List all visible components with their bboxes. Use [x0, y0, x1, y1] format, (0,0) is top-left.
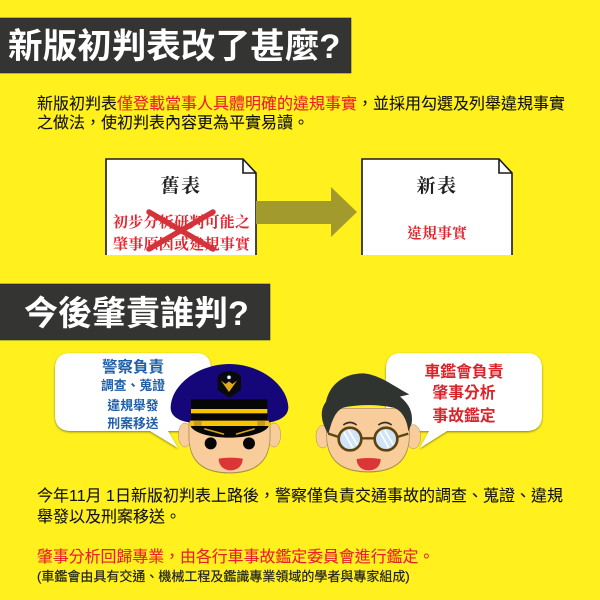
- heading: who decides: [0, 284, 270, 340]
- text block: police role: 今年11月 1日新版初判表上路後，警察僅負責交通事故的調查、蒐證、違規: [37, 487, 563, 505]
- callout: police duties: 違規舉發: [107, 398, 159, 413]
- heading: what changed: 新版初判表改了甚麼?: [8, 28, 340, 66]
- text block: police role: 舉發以及刑案移送。: [37, 508, 181, 526]
- panel: old form: 初步分析研判可能之: [113, 213, 250, 231]
- callout: review committee duties: [386, 353, 542, 448]
- icon: expert with glasses: [316, 373, 421, 472]
- panel: new form: [362, 159, 512, 255]
- callout: police duties: 調查、蒐證: [101, 378, 165, 393]
- panel: old form: 肇事原因或違規事實: [113, 235, 252, 253]
- callout: police duties: [55, 353, 211, 448]
- icon: police badge: [218, 371, 241, 398]
- heading: who decides: 今後肇責誰判?: [24, 295, 249, 333]
- icon: red cross: [149, 212, 213, 249]
- text block: intro: 之做法，使初判表內容更為平實易讀。: [37, 113, 309, 132]
- panel: old form: 舊表: [160, 175, 202, 197]
- icon: police officer: [171, 364, 288, 473]
- panel: new form: 違規事實: [407, 224, 469, 242]
- arrow: old to new: [256, 187, 357, 237]
- callout: police duties: 警察負責: [102, 357, 164, 376]
- text block: intro: 新版初判表僅登載當事人具體明確的違規事實，並採用勾選及列舉違規事實: [37, 94, 565, 113]
- heading: what changed: [0, 18, 351, 73]
- callout: review committee duties: 車鑑會負責: [424, 362, 504, 381]
- callout: police duties: 刑案移送: [107, 416, 159, 431]
- text block: analysis returns to experts: 肇事分析回歸專業，由各行車事故鑑定委員會進行鑑定。: [37, 548, 434, 566]
- text block: intro: [37, 94, 565, 132]
- text block: committee note: (車鑑會由具有交通、機械工程及鑑識專業領域的學者與專家組成): [37, 569, 410, 584]
- callout: review committee duties: 事故鑑定: [432, 406, 496, 425]
- panel: new form: 新表: [416, 175, 458, 197]
- callout: review committee duties: 肇事分析: [432, 383, 496, 402]
- panel: old form: [106, 159, 256, 255]
- text block: police role: [37, 487, 563, 526]
